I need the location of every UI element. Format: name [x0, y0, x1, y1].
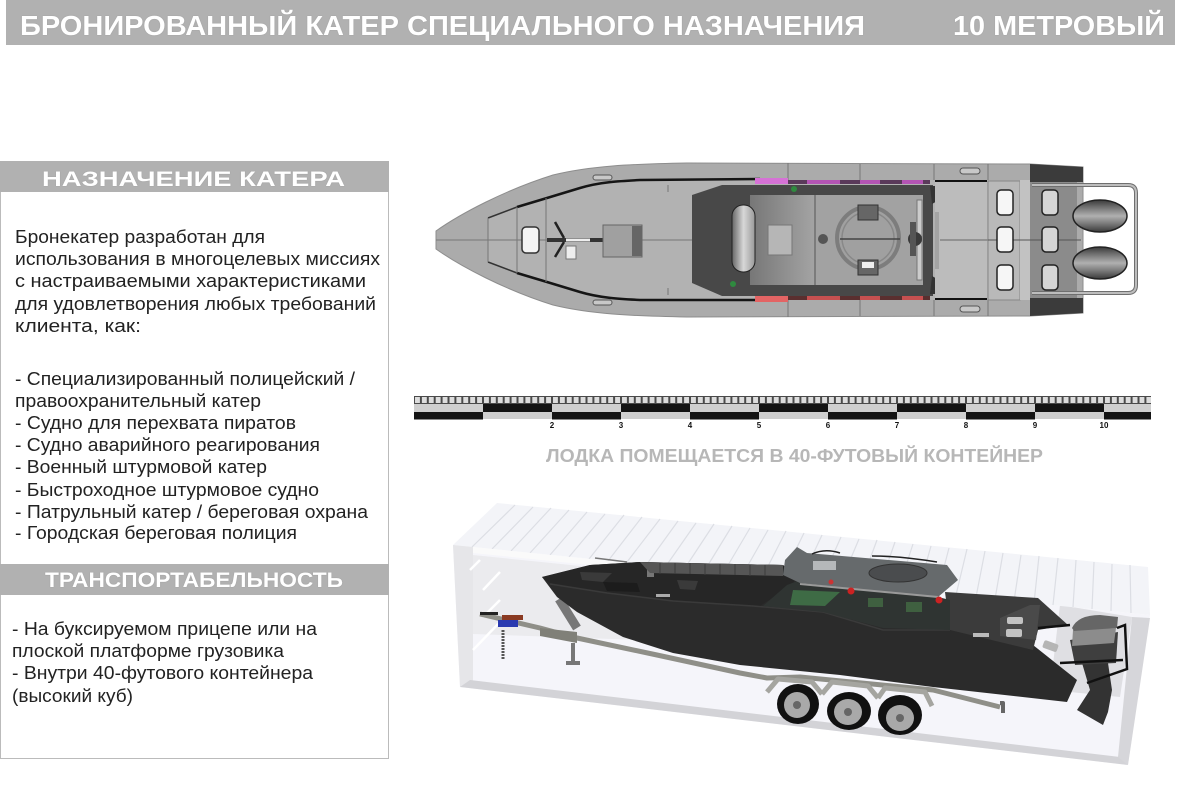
text block: mission list: - Судно для перехвата пиратов [15, 413, 296, 433]
cabin warning lights [848, 588, 854, 594]
cabin roof [750, 195, 815, 285]
scale numbers: 9 [1033, 421, 1038, 430]
cabin roof [783, 547, 958, 597]
text block: description [15, 227, 380, 336]
text block: description: использования в многоцелевых миссиях [15, 249, 380, 269]
roof hatch [768, 225, 792, 255]
stern rail [1032, 185, 1136, 293]
outboard motor [1070, 615, 1118, 725]
air tank [732, 205, 755, 272]
heading: transportability [0, 564, 389, 595]
scale numbers [550, 421, 1109, 430]
outboard motors [1073, 200, 1127, 279]
text block: mission list: - Военный штурмовой катер [15, 457, 267, 477]
text block: mission list [15, 369, 369, 543]
text block: mission list: правоохранительный катер [15, 391, 261, 411]
hull outline [436, 163, 1083, 317]
text block: transport options: (высокий куб) [12, 686, 133, 706]
aft deck [945, 592, 1068, 650]
panel: transportability [0, 564, 389, 758]
caption: container fit: ЛОДКА ПОМЕЩАЕТСЯ В 40-ФУТОВЫЙ КОНТЕЙНЕР [546, 445, 1043, 466]
boat interior [542, 562, 795, 606]
foredeck [488, 180, 990, 300]
text block: description: Бронекатер разработан для [15, 227, 265, 247]
text block: transport options [12, 619, 318, 706]
text block: mission list: - Городская береговая полиция [15, 523, 297, 543]
scale numbers: 3 [619, 421, 624, 430]
title bar [6, 0, 1175, 45]
boat top view diagram [436, 163, 1136, 317]
text block: mission list: - Специализированный полицейский / [15, 369, 355, 389]
boat hull [542, 547, 1077, 702]
trailer winch [480, 612, 577, 643]
cabin side [763, 580, 950, 630]
text block: transport options: плоской платформе грузовика [12, 641, 285, 661]
cleats [593, 168, 980, 312]
scale numbers: 6 [826, 421, 831, 430]
text block: description: клиента, как: [15, 316, 141, 336]
trailer wheels [777, 684, 922, 735]
text block: mission list: - Быстроходное штурмовое судно [15, 480, 319, 500]
title: БРОНИРОВАННЫЙ КАТЕР СПЕЦИАЛЬНОГО НАЗНАЧЕНИЯ [20, 9, 865, 41]
text block: transport options: - Внутри 40-футового контейнера [12, 663, 314, 683]
text block: transport options: - На буксируемом прицепе или на [12, 619, 318, 639]
heading: boat purpose [0, 161, 389, 192]
scale numbers: 4 [688, 421, 693, 430]
heading: transportability: ТРАНСПОРТАБЕЛЬНОСТЬ [45, 569, 343, 592]
scale numbers: 8 [964, 421, 969, 430]
cabin aft [908, 186, 939, 294]
stern deck [935, 182, 987, 298]
cockpit [692, 185, 933, 296]
scale numbers: 5 [757, 421, 762, 430]
scale numbers: 10 [1100, 421, 1109, 430]
container with boat on trailer [453, 503, 1150, 765]
scale numbers: 2 [550, 421, 555, 430]
boat length label: 10 МЕТРОВЫЙ [953, 9, 1165, 41]
text block: description: с настраиваемыми характеристиками [15, 271, 366, 291]
scale numbers: 7 [895, 421, 900, 430]
bow hatch [522, 227, 539, 253]
text block: description: для удовлетворения любых требований [15, 294, 376, 314]
scale ruler [414, 396, 1151, 430]
container walls [453, 545, 1150, 765]
transom corners [1030, 164, 1083, 316]
equipment markers [791, 186, 797, 192]
text block: mission list: - Патрульный катер / береговая охрана [15, 502, 369, 522]
panel: boat purpose [0, 161, 389, 564]
motor guard rail [1038, 625, 1127, 683]
heading: boat purpose: НАЗНАЧЕНИЕ КАТЕРА [42, 168, 345, 191]
stern hatches [988, 180, 1081, 300]
turret hatch [818, 205, 900, 275]
container roof [453, 503, 1150, 615]
side strips [755, 178, 930, 302]
trailer frame [480, 599, 1003, 713]
far gunwale [595, 558, 783, 576]
deck gun and seat [547, 222, 642, 259]
container frame [453, 545, 1150, 765]
text block: mission list: - Судно аварийного реагирования [15, 435, 320, 455]
